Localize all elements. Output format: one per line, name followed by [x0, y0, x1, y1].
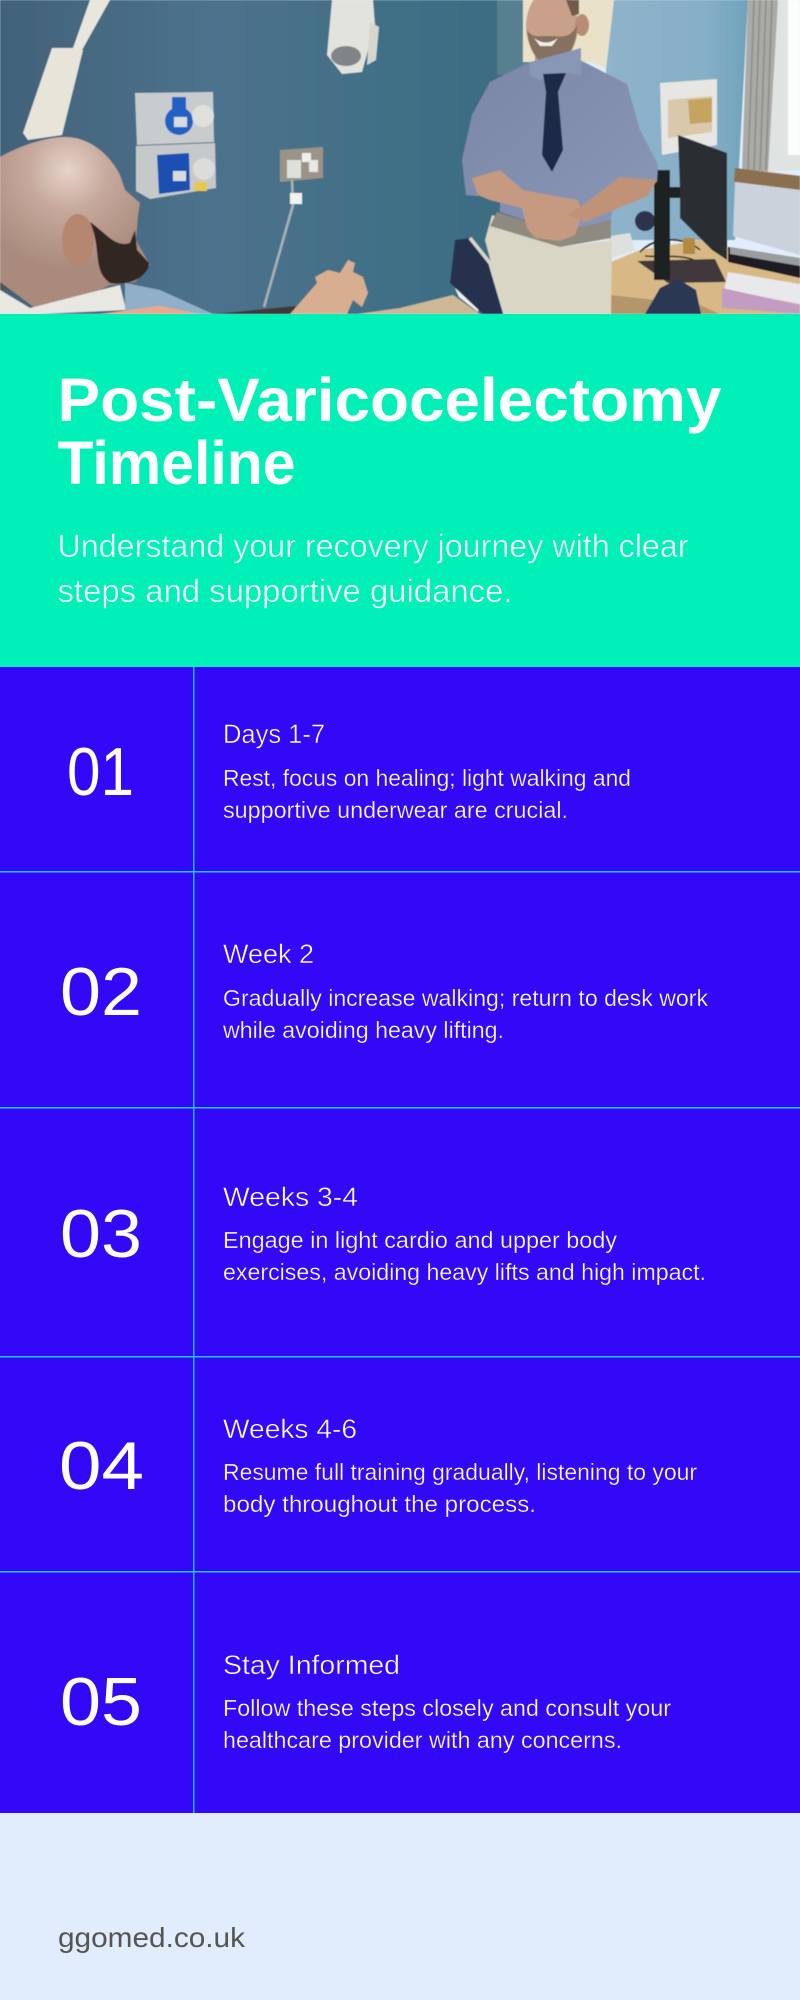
step 02 body: while avoiding heavy lifting. [222, 1017, 504, 1043]
step 04 body: body throughout the process. [223, 1491, 536, 1517]
number 01: 01 [67, 734, 134, 810]
step 02 [60, 939, 708, 1043]
step 03 [60, 1182, 706, 1285]
subtitle: steps and supportive guidance. [58, 573, 512, 609]
panel: footer [0, 1813, 800, 2000]
cream column [523, 0, 617, 70]
patient: ear [62, 214, 94, 266]
ceiling camera [327, 0, 379, 74]
patient: white collar [0, 285, 126, 314]
photo: doctor talking with patient [0, 0, 800, 314]
number 03: 03 [60, 1196, 142, 1272]
lower wall below the window [733, 182, 800, 255]
subtitle [58, 528, 689, 609]
raised leg [357, 295, 480, 314]
patient: beard [90, 222, 149, 284]
step 02 heading: Week 2 [223, 939, 314, 969]
desk globe [635, 211, 655, 231]
monitor [678, 135, 727, 260]
number 05: 05 [60, 1664, 142, 1740]
patient: head and neck [0, 137, 150, 308]
blue clinic wall [0, 0, 530, 314]
number 02: 02 [60, 954, 142, 1030]
step 02 body [222, 985, 708, 1043]
number 04: 04 [59, 1428, 144, 1504]
step 03 body: Engage in light cardio and upper body [223, 1227, 618, 1253]
step 04 body [223, 1459, 697, 1517]
step 01 heading: Days 1-7 [223, 719, 325, 749]
sock [455, 288, 480, 312]
curtain [742, 0, 780, 172]
step 03 heading: Weeks 3-4 [223, 1182, 358, 1212]
patient: dark background corner [0, 282, 10, 290]
industrial socket: bottom [136, 143, 216, 199]
monitor stand and base [637, 170, 726, 283]
man: shirt [462, 60, 658, 232]
man: tie [542, 73, 566, 172]
subtitle: Understand your recovery journey with clear [58, 528, 689, 564]
man: left forearm and hands [472, 170, 582, 241]
medical arm: upper part [73, 0, 110, 50]
industrial socket: top [135, 92, 214, 145]
man: collar [530, 48, 581, 80]
man: belt [490, 212, 611, 247]
step 01 body: supportive underwear are crucial. [223, 797, 568, 823]
footer website: ggomed.co.uk [58, 1922, 246, 1953]
window frame and glare [768, 0, 800, 172]
books on desk [722, 272, 800, 314]
step 05 [60, 1650, 671, 1753]
step 04 heading: Weeks 4-6 [223, 1414, 357, 1444]
step 01 [67, 719, 631, 823]
step 05 body [223, 1695, 671, 1753]
step 05 body: healthcare provider with any concerns. [223, 1727, 622, 1753]
step 03 body [223, 1227, 706, 1285]
patient: clasped hands [290, 260, 368, 314]
panel: title block [0, 314, 800, 667]
step 01 body [223, 765, 631, 823]
keyboard [728, 247, 800, 278]
man: trousers [485, 215, 612, 314]
foreground shoe [645, 279, 701, 314]
step 02 body: Gradually increase walking; return to desk work [223, 985, 708, 1011]
man: neck and head [526, 0, 589, 73]
patient: orange blanket [100, 306, 200, 314]
step 01 body: Rest, focus on healing; light walking and [223, 765, 631, 791]
title: Post-Varicocelectomy [58, 366, 722, 434]
raised shoe [450, 238, 505, 314]
desk [611, 240, 800, 314]
right light blue wall [606, 0, 748, 240]
patient: blue shirt [125, 283, 213, 314]
panel: timeline [0, 667, 800, 1813]
medical arm: lower panel [23, 48, 83, 140]
wall poster [660, 79, 717, 155]
step 04 [59, 1414, 697, 1517]
patient: tattooed arm [215, 306, 300, 314]
wall corner strip [497, 0, 527, 75]
step 05 heading: Stay Informed [223, 1650, 400, 1680]
title [58, 366, 722, 497]
step 03 body: exercises, avoiding heavy lifts and high impact. [223, 1259, 706, 1285]
step 05 body: Follow these steps closely and consult your [223, 1695, 671, 1721]
man: right forearm [568, 177, 657, 222]
wall outlet with plug [280, 147, 323, 182]
power cable [264, 180, 302, 307]
window sill [734, 168, 800, 190]
title: Timeline [58, 429, 296, 497]
step 04 body: Resume full training gradually, listening to your [223, 1459, 697, 1485]
telephone and desk clutter [610, 232, 701, 260]
